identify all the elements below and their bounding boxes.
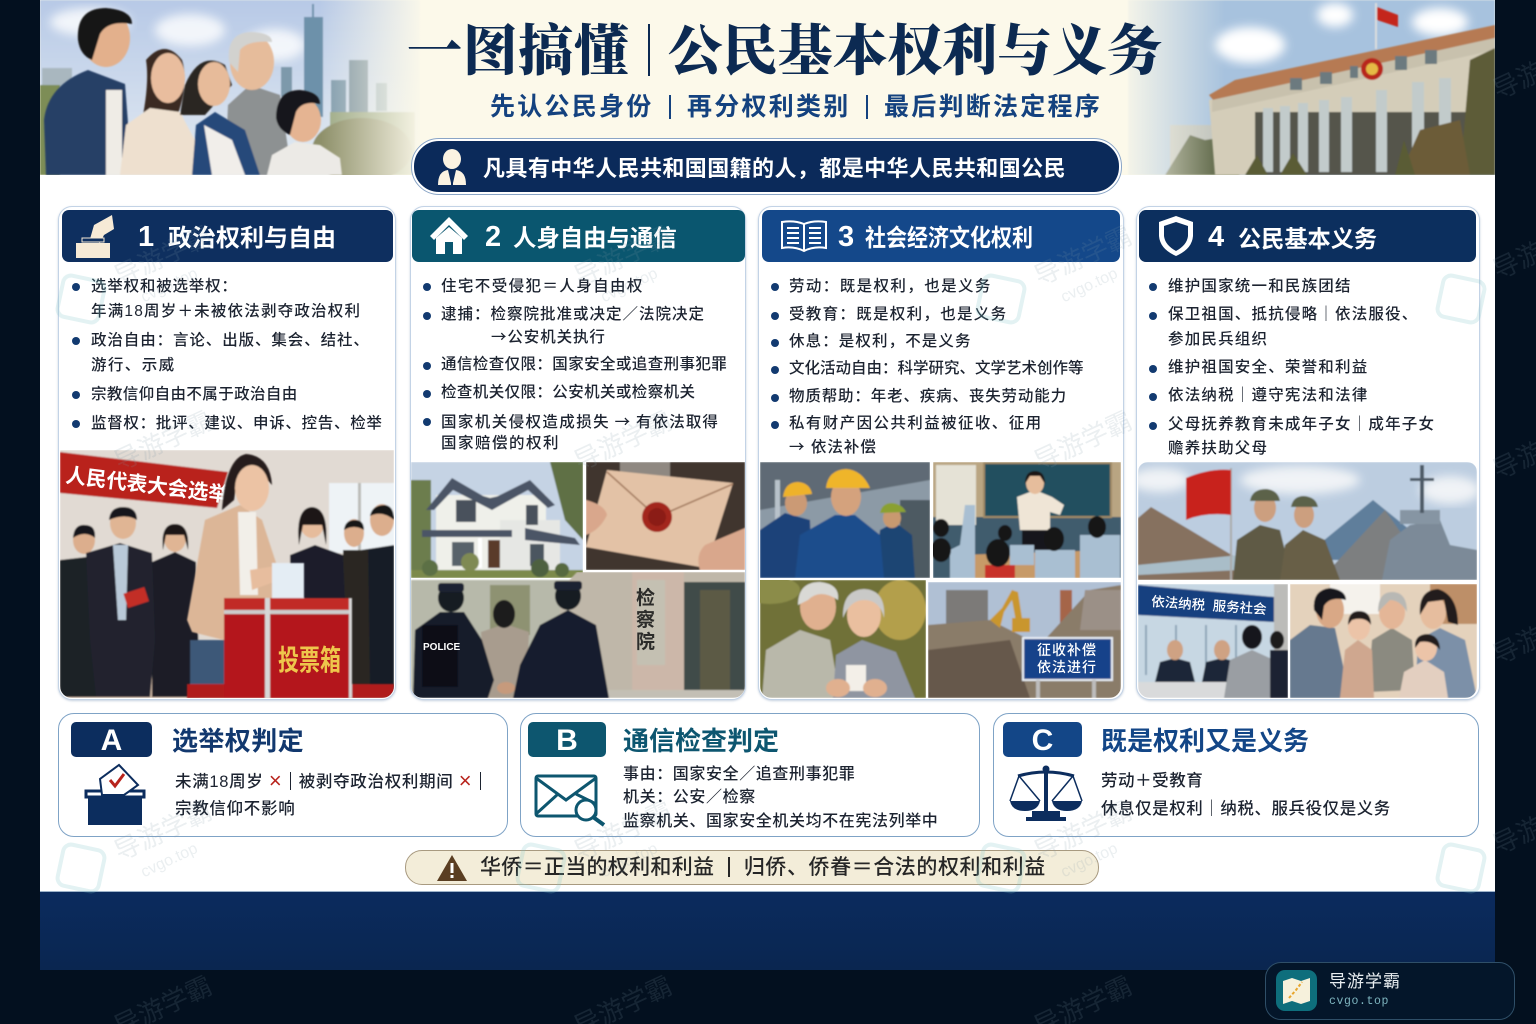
banner text: 人民代表大会选举: [64, 464, 230, 507]
panel 3 list: 劳动：既是权利，也是义务: [789, 278, 992, 294]
panel 1 list: 年满18周岁＋未被依法剥夺政治权利: [91, 302, 361, 320]
panel 2 heading: 人身自由与通信: [513, 225, 677, 251]
title C: 既是权利又是义务: [1101, 726, 1309, 756]
platform and ballot box: [187, 684, 394, 698]
panel 4 list: 依法纳税｜遵守宪法和法律: [1168, 386, 1368, 404]
citizen definition banner: [411, 138, 1122, 195]
panel 2 list: [423, 278, 727, 452]
panel 1: political rights: [58, 206, 396, 700]
panel 4 heading: [1139, 210, 1476, 262]
voter woman: [190, 640, 226, 688]
sign text: 依法进行: [1037, 659, 1097, 675]
card B: correspondence inspection: [520, 713, 980, 837]
panel 3 heading: [762, 210, 1120, 262]
title: 一图搞懂 公民基本权利与义务: [407, 21, 1162, 82]
photo: demolition with compensation sign: [928, 582, 1121, 698]
panel 2 heading: 2: [485, 221, 501, 253]
photo: voting at ballot box: [60, 450, 394, 698]
sign text: 征收补偿: [1037, 642, 1097, 658]
right photo: Great Hall: [1128, 0, 1495, 175]
watermark layer: cvgo.top: [1058, 265, 1120, 306]
watermark layer: 导游学霸: [570, 795, 676, 867]
panel 3 heading: 社会经济文化权利: [865, 225, 1033, 252]
brand name: 导游学霸: [1329, 972, 1401, 991]
watermark layer: 导游学霸: [110, 405, 216, 477]
back people: [60, 556, 100, 697]
watermark layer: cvgo.top: [1058, 840, 1120, 881]
photo: classroom: [933, 462, 1121, 578]
title B: 通信检查判定: [623, 726, 779, 756]
panel 4 list: [1149, 278, 1435, 456]
sign text: [1037, 642, 1097, 675]
icon: shield: [1159, 216, 1193, 256]
text A: 宗教信仰不影响: [175, 800, 295, 818]
title A: 选举权判定: [172, 726, 304, 756]
left officer: [413, 612, 494, 698]
tag A: A: [101, 724, 122, 757]
panel 3 list: 休息：是权利，不是义务: [789, 332, 972, 350]
panel 1 list: 政治自由：言论、出版、集会、结社、: [91, 332, 370, 348]
tag B: [528, 722, 606, 757]
text C: 休息仅是权利｜纳税、服兵役仅是义务: [1101, 800, 1391, 818]
panel 1 heading: 1: [138, 221, 154, 253]
watermark layer: 导游学霸: [110, 220, 216, 292]
banner text: 依法纳税 服务社会: [1151, 594, 1268, 617]
card C: both right and duty: [993, 713, 1479, 837]
panel 2 list: →: [615, 410, 631, 432]
panel 1 heading: [62, 210, 393, 262]
watermark layer: cvgo.top: [138, 265, 200, 306]
left photo: family and skyline: [40, 0, 420, 182]
panel 2 list: 检查机关仅限：公安机关或检察机关: [441, 384, 695, 400]
icon: house: [430, 217, 468, 254]
photo: house: [411, 462, 583, 578]
photo: family care: [1290, 584, 1477, 698]
panel 3: social, economic and cultural rights: [758, 206, 1124, 700]
watermark layer: 导游学霸: [1030, 795, 1136, 867]
warning text: 华侨＝正当的权利和利益 归侨、侨眷＝合法的权利和利益: [480, 856, 1046, 879]
panel 1 list: 宗教信仰自由不属于政治自由: [91, 386, 298, 402]
icon: casting ballot: [76, 215, 114, 258]
watermark layer: cvgo.top: [598, 265, 660, 306]
watermark layer: 导游学霸: [1030, 405, 1136, 477]
panel 2 list: →公安机关执行: [491, 324, 606, 346]
photo: tax office: [1138, 584, 1288, 698]
bottom navy band: [40, 891, 1495, 970]
sign: procuratorate: [636, 586, 655, 653]
icon: brand map: [1276, 970, 1317, 1011]
brand url: cvgo.top: [1329, 995, 1389, 1008]
panel 4 list: 保卫祖国、抵抗侵略｜依法服役、: [1168, 306, 1419, 322]
sign: procuratorate: 检: [636, 586, 655, 609]
woman 2: [140, 49, 185, 140]
panel 4 heading: 4: [1208, 221, 1224, 253]
watermark layer: cvgo.top: [138, 840, 200, 881]
tag A: [71, 722, 152, 757]
panel 2 heading: [412, 210, 745, 262]
text A: 未满18周岁 × 被剥夺政治权利期间 ×: [175, 768, 472, 793]
watermark layer: 导游学霸: [110, 795, 216, 867]
panel 2: personal freedom: [410, 206, 746, 700]
panel 3 list: → 依法补偿: [789, 434, 877, 456]
box label: 投票箱: [278, 645, 341, 677]
tag C: C: [1032, 724, 1053, 757]
panel 2 list: 国家机关侵权造成损失 有依法取得: [441, 414, 719, 430]
old man: [225, 85, 292, 175]
watermark layer: 导游学霸: [570, 405, 676, 477]
watermark layer: 导游学霸: [570, 220, 676, 292]
panel 2 list: 通信检查仅限：国家安全或追查刑事犯罪: [441, 356, 727, 372]
panel 4 heading: 公民基本义务: [1238, 226, 1377, 252]
photo: police arrest and procuratorate: [411, 572, 745, 698]
panel 4 list: 父母抚养教育未成年子女｜成年子女: [1168, 416, 1435, 432]
warning strip: overseas Chinese: [405, 850, 1099, 885]
panel 3 heading: 3: [838, 221, 854, 253]
photo: soldiers, flag and warship: [1138, 462, 1477, 580]
photo: workers: [760, 462, 930, 578]
panel 3 list: 受教育：既是权利，也是义务: [789, 306, 1007, 322]
panel 3 list: 私有财产因公共利益被征收、征用: [789, 414, 1043, 432]
text B: 机关：公安／检察: [623, 789, 756, 806]
banner text: 凡具有中华人民共和国国籍的人，都是中华人民共和国公民: [483, 156, 1066, 181]
photo: elderly couple: [760, 580, 926, 698]
sign: procuratorate: 察: [636, 609, 655, 631]
panel 3 list: 文化活动自由：科学研究、文学艺术创作等: [789, 360, 1084, 376]
icon: open book: [781, 220, 827, 252]
subtitle: 先认公民身份 再分权利类别 最后判断法定程序: [490, 93, 1102, 121]
text A: [175, 768, 481, 818]
label: police: POLICE: [423, 642, 461, 653]
card A: election judgement: [58, 713, 508, 837]
panel 4 list: 赡养扶助父母: [1168, 440, 1268, 456]
icon: scales: [1009, 766, 1083, 821]
text B: 事由：国家安全／追查刑事犯罪: [623, 766, 855, 783]
brand badge: [1265, 962, 1515, 1020]
panel 2 list: 国家赔偿的权利: [441, 434, 560, 452]
panel 4: civic duties: [1136, 206, 1480, 700]
panel 1 list: 监督权：批评、建议、申诉、控告、检举: [91, 414, 383, 432]
icon: warning triangle: [437, 855, 467, 881]
panel 3 list: 物质帮助：年老、疾病、丧失劳动能力: [789, 388, 1067, 404]
panel 1 heading: 政治权利与自由: [168, 225, 336, 252]
text B: 监察机关、国家安全机关均不在宪法列举中: [623, 813, 938, 830]
woman 3: [180, 60, 232, 115]
panel 2 list: 住宅不受侵犯＝人身自由权: [441, 278, 644, 294]
text C: 劳动＋受教育: [1101, 772, 1203, 790]
panel 1 list: 游行、示威: [91, 356, 176, 374]
right officer: [513, 610, 609, 698]
photo: sealed letter: [586, 462, 745, 570]
man: [44, 70, 132, 175]
tag C: [1003, 722, 1082, 757]
icon: citizen: [438, 149, 466, 185]
watermark layer: cvgo.top: [598, 840, 660, 881]
sign: procuratorate: 院: [636, 630, 655, 653]
watermark layer: 导游学霸: [1030, 220, 1136, 292]
tag B: B: [556, 724, 578, 757]
icon: ballot box: [84, 764, 146, 825]
boy: [267, 142, 342, 175]
panel 3 list: [771, 278, 1084, 456]
panel 1 list: 选举权和被选举权：: [91, 278, 238, 294]
icon: envelope with magnifier: [534, 774, 606, 827]
header background with photos: [40, 0, 1495, 175]
panel 4 list: 维护祖国安全、荣誉和利益: [1168, 358, 1368, 376]
middle person: [481, 624, 529, 698]
panel 4 list: 参加民兵组织: [1168, 330, 1268, 348]
text B: [623, 765, 938, 830]
text C: [1101, 772, 1391, 818]
panel 1 list: [72, 278, 383, 432]
panel 4 list: 维护国家统一和民族团结: [1168, 278, 1352, 294]
panel 2 list: 逮捕：检察院批准或决定／法院决定: [441, 306, 705, 322]
